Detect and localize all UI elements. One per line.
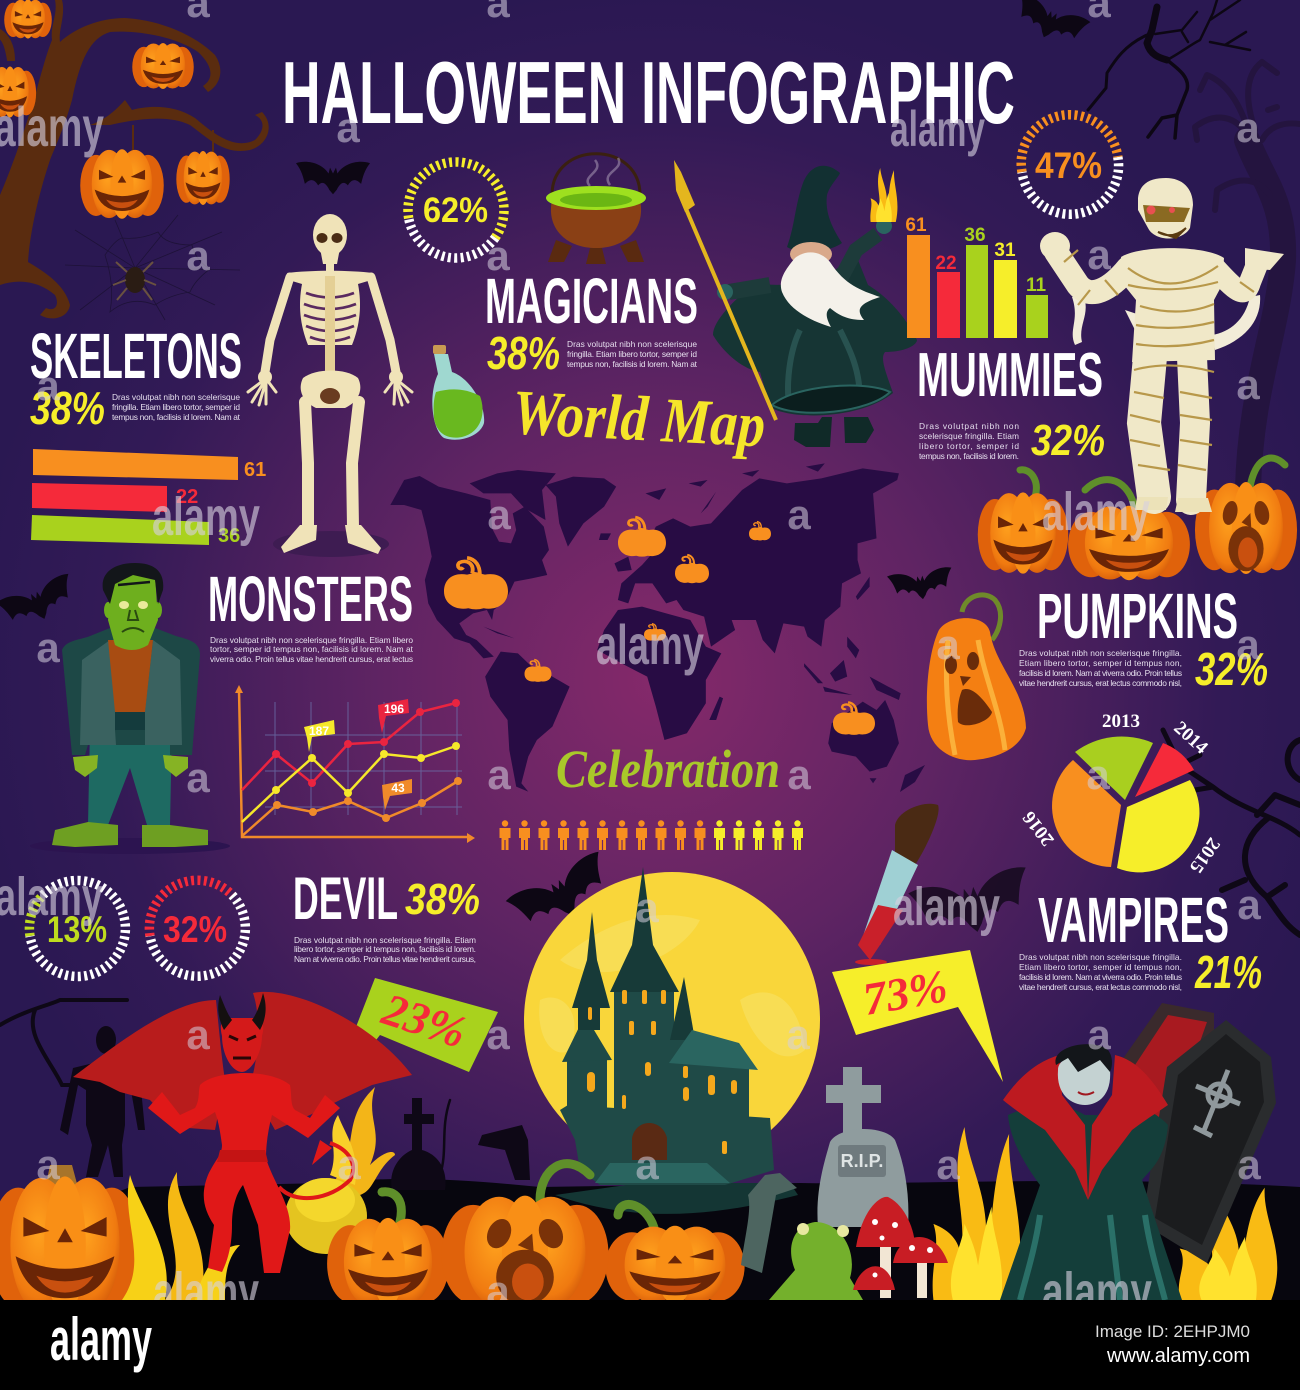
watermark: a bbox=[486, 1011, 510, 1058]
bar chart bbox=[31, 449, 266, 547]
bar chart: 22 bbox=[935, 253, 957, 274]
text block: viverra odio. Proin tellus vitae hendrerit cursus, erat lectus bbox=[210, 654, 413, 664]
callout: 73% bbox=[832, 950, 1003, 1082]
watermark: alamy bbox=[1042, 482, 1150, 542]
value: 38% bbox=[487, 327, 560, 379]
illustration: coffin bbox=[1122, 1003, 1276, 1263]
gauge: 32% bbox=[149, 880, 245, 976]
flag: 196 bbox=[378, 699, 409, 733]
panel: magicians bbox=[485, 265, 698, 379]
value: 21% bbox=[1194, 946, 1262, 998]
watermark: a bbox=[1086, 751, 1110, 798]
watermark: a bbox=[787, 751, 811, 798]
line chart bbox=[235, 685, 475, 843]
text block: Dras volutpat nibh non scelerisque fringilla. Etiam libero bbox=[210, 635, 413, 645]
text block: Dras volutpat nibh non scelerisque fringilla. bbox=[1019, 648, 1182, 658]
watermark: a bbox=[186, 754, 210, 801]
text block: libero tortor, semper id tempus non, facilisis id lorem. bbox=[294, 944, 476, 954]
text block: vitae hendrerit cursus, erat lectus commodo nisl, bbox=[1019, 678, 1182, 688]
watermark: a bbox=[486, 1267, 510, 1314]
illustration: zombie hand bbox=[741, 1173, 797, 1273]
gauge: 62%: 62% bbox=[423, 191, 488, 230]
staff bbox=[674, 160, 776, 420]
footer image id: Image ID: 2EHPJM0 bbox=[1095, 1322, 1250, 1341]
illustration: moon and castle bbox=[524, 867, 820, 1214]
bar chart: 22 bbox=[176, 486, 198, 508]
illustration: frog and mushrooms bbox=[769, 1197, 948, 1300]
illustration: pumpkins under mummy bbox=[978, 458, 1297, 580]
watermark: a bbox=[186, 1011, 210, 1058]
pie chart bbox=[1019, 711, 1224, 877]
pie chart: 2015 bbox=[1185, 834, 1224, 877]
watermark: a bbox=[635, 1141, 659, 1188]
heading: SKELETONS bbox=[30, 320, 242, 392]
text block: fringilla. Etiam libero tortor, semper id bbox=[567, 349, 697, 359]
text block: scelerisque fringilla. Etiam bbox=[919, 431, 1019, 441]
footer logo: alamy bbox=[50, 1306, 152, 1373]
flame left of devil bbox=[122, 1172, 240, 1300]
coffin cross bbox=[1194, 1070, 1240, 1136]
bar chart: 36 bbox=[964, 225, 986, 246]
icon: spider web with spider bbox=[65, 215, 240, 320]
watermark: alamy bbox=[596, 613, 704, 676]
illustration: top-right black branches bbox=[1088, 0, 1250, 138]
flag: 43: 43 bbox=[391, 781, 405, 795]
watermark: a bbox=[1087, 1011, 1111, 1058]
gauge: 13%: 13% bbox=[47, 909, 107, 950]
watermark: a bbox=[1237, 1141, 1261, 1188]
text block: Dras volutpat nibh non scelerisque bbox=[567, 339, 697, 349]
bar chart: 61 bbox=[244, 459, 266, 481]
title: celebration: Celebration bbox=[556, 739, 780, 799]
icon row: people bbox=[500, 820, 803, 850]
gauge: 32%: 32% bbox=[163, 909, 227, 950]
character: vampire bbox=[1000, 1044, 1182, 1300]
text block: tempus non, facilisis id lorem. Nam at bbox=[112, 412, 241, 422]
heading: MAGICIANS bbox=[485, 265, 698, 337]
illustration: flames bbox=[285, 1087, 1277, 1300]
flag: 187 bbox=[304, 720, 335, 752]
watermark: a bbox=[936, 621, 960, 668]
watermark: a bbox=[337, 1141, 361, 1188]
text block: facilisis id lorem. Nam at viverra odio. Proin tellus bbox=[1019, 972, 1182, 982]
footer url: www.alamy.com bbox=[1106, 1345, 1250, 1367]
character: mummy bbox=[1040, 178, 1284, 512]
gauge: 47% bbox=[1021, 115, 1119, 214]
icon: screaming pumpkin bbox=[927, 595, 1026, 760]
watermark: a bbox=[1236, 361, 1260, 408]
panel: pumpkins bbox=[927, 580, 1268, 877]
watermark: a bbox=[936, 1141, 960, 1188]
text block bbox=[1019, 952, 1182, 992]
bar chart: 36 bbox=[218, 525, 240, 547]
character: wizard bbox=[674, 160, 917, 447]
panel: monsters bbox=[208, 563, 475, 843]
flag: 43 bbox=[382, 779, 412, 810]
character: monster bbox=[30, 563, 230, 854]
flag: 187: 187 bbox=[309, 724, 329, 738]
illustration: pumpkin tree bbox=[0, 0, 269, 318]
watermark: alamy bbox=[1042, 1262, 1152, 1322]
callout: 23%: 23% bbox=[376, 983, 472, 1058]
illustration: right-side dead tree bbox=[1163, 730, 1300, 935]
text block: facilisis id lorem. Nam at viverra odio. Proin tellus bbox=[1019, 668, 1182, 678]
illustration: tombstone: R.I.P. bbox=[841, 1151, 883, 1171]
text block: tortor, semper id tempus non, facilisis id lorem. Nam at bbox=[210, 644, 414, 654]
heading: DEVIL bbox=[293, 865, 398, 932]
bar chart: 11 bbox=[1026, 275, 1046, 296]
text block: vitae hendrerit cursus, erat lectus commodo nisl, bbox=[1019, 982, 1182, 992]
bones bbox=[248, 277, 412, 527]
watermark: alamy bbox=[893, 877, 1000, 937]
title: world map: World Map bbox=[511, 376, 767, 461]
watermark: a bbox=[487, 491, 511, 538]
illustration: bottom pumpkins bbox=[0, 1164, 745, 1314]
icon: potion bottle bbox=[432, 345, 484, 440]
watermark: a bbox=[1236, 621, 1260, 668]
watermark: alamy bbox=[890, 101, 985, 157]
world map bbox=[390, 463, 925, 792]
watermark: a bbox=[787, 491, 811, 538]
watermark: a bbox=[635, 884, 659, 931]
watermark: a bbox=[36, 1141, 60, 1188]
text block: Etiam libero tortor, semper id tempus non, bbox=[1019, 962, 1182, 972]
watermark: a bbox=[786, 1011, 810, 1058]
watermark: a bbox=[36, 624, 60, 671]
gauge: 62% bbox=[408, 162, 504, 258]
watermark: a bbox=[336, 104, 360, 151]
value: 32% bbox=[1031, 416, 1105, 465]
watermark: alamy bbox=[152, 487, 260, 547]
pie chart: 2013 bbox=[1102, 711, 1140, 732]
text block: Dras volutpat nibh non scelerisque fringilla. Etiam bbox=[294, 935, 476, 945]
value: 32% bbox=[1195, 643, 1268, 695]
panel: skeletons bbox=[30, 320, 266, 547]
watermark: a bbox=[1237, 881, 1261, 928]
text block: Etiam libero tortor, semper id tempus non, bbox=[1019, 658, 1182, 668]
map pumpkins bbox=[444, 517, 875, 735]
text block bbox=[1019, 648, 1182, 688]
knife bbox=[855, 804, 939, 965]
watermark: alamy bbox=[153, 1262, 259, 1322]
watermark: a bbox=[1087, 231, 1111, 278]
bar chart bbox=[905, 215, 1048, 338]
text block: libero tortor, semper id bbox=[919, 441, 1019, 451]
text block: Dras volutpat nibh non scelerisque bbox=[112, 392, 240, 402]
heading: MUMMIES bbox=[917, 341, 1103, 410]
text block bbox=[210, 635, 414, 664]
pie chart: 2014 bbox=[1170, 717, 1212, 759]
flag: 196: 196 bbox=[384, 702, 404, 716]
callout: 73%: 73% bbox=[859, 960, 951, 1025]
skeleton silhouette bbox=[60, 1026, 145, 1177]
icon: bats bbox=[0, 0, 1091, 984]
illustration: ground bbox=[0, 1179, 1300, 1300]
watermark: a bbox=[186, 232, 210, 279]
bar chart: 61 bbox=[905, 215, 927, 236]
icon: cauldron bbox=[546, 154, 646, 264]
text block bbox=[919, 421, 1019, 461]
gauge: 13% bbox=[29, 880, 125, 976]
pie chart: 2016 bbox=[1019, 807, 1059, 850]
value: 38% bbox=[405, 875, 480, 924]
text block: Nam at viverra odio. Proin tellus vitae hendrerit cursus, bbox=[294, 954, 476, 964]
text block: tempus non, facilisis id lorem. bbox=[919, 451, 1019, 461]
character: skeleton bbox=[248, 214, 412, 557]
text block: fringilla. Etiam libero tortor, semper id bbox=[112, 402, 240, 412]
illustration: graveyard silhouettes bbox=[0, 1000, 530, 1190]
panel: vampires text bbox=[1019, 884, 1262, 998]
heading: MONSTERS bbox=[208, 563, 413, 635]
panel: devil text bbox=[293, 865, 480, 964]
text block: Dras volutpat nibh non scelerisque fringilla. bbox=[1019, 952, 1182, 962]
icon: dark bat bbox=[908, 865, 1036, 945]
gauge: 47%: 47% bbox=[1035, 145, 1102, 186]
character: devil bbox=[73, 992, 412, 1273]
illustration: right dark tree bbox=[1195, 62, 1300, 490]
watermark: a bbox=[487, 751, 511, 798]
watermark: a bbox=[486, 232, 510, 279]
fire bbox=[870, 168, 897, 222]
text block: Dras volutpat nibh non bbox=[919, 421, 1019, 431]
bar chart: 31 bbox=[994, 240, 1016, 261]
watermark: a bbox=[1236, 104, 1260, 151]
text block: tempus non, facilisis id lorem. Nam at bbox=[567, 359, 698, 369]
callout: 23% bbox=[349, 978, 498, 1072]
value: 38% bbox=[30, 382, 105, 434]
watermark: a bbox=[36, 362, 60, 409]
text block bbox=[567, 339, 698, 369]
footer bar bbox=[0, 1300, 1300, 1390]
panel: mummies bbox=[905, 215, 1105, 465]
text block bbox=[112, 392, 241, 422]
pumpkin lanterns bbox=[0, 0, 230, 219]
text block bbox=[294, 935, 476, 964]
illustration: tombstone bbox=[817, 1067, 908, 1227]
